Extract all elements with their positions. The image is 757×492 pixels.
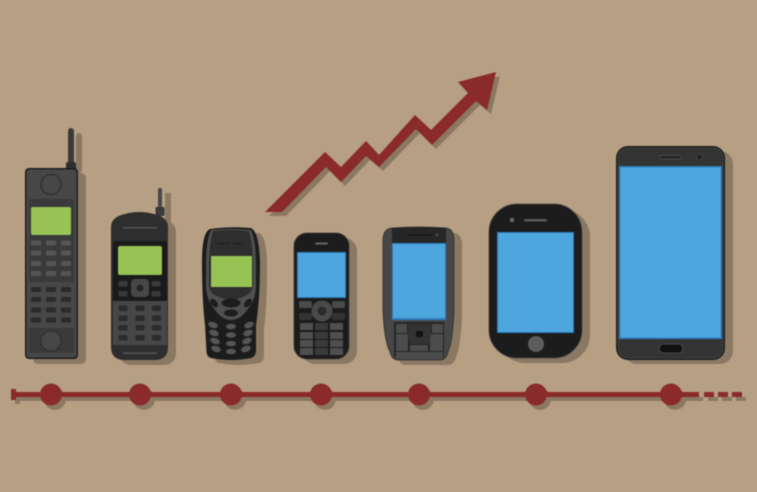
- phone 4: feature phone: [294, 233, 357, 364]
- phone 6: early smartphone: [489, 204, 590, 363]
- phone 2: compact handset: [111, 188, 176, 365]
- phone 3: classic candybar: [202, 227, 267, 365]
- phone 7: modern smartphone: [616, 146, 733, 364]
- timeline shadow: [15, 388, 746, 410]
- timeline: [11, 384, 746, 410]
- phone 5: PDA phone: [383, 227, 462, 365]
- phone 1: brick phone: [25, 128, 86, 364]
- timeline markers: [40, 384, 682, 406]
- arrow: rising trend: [265, 72, 500, 216]
- timeline line: [11, 389, 742, 400]
